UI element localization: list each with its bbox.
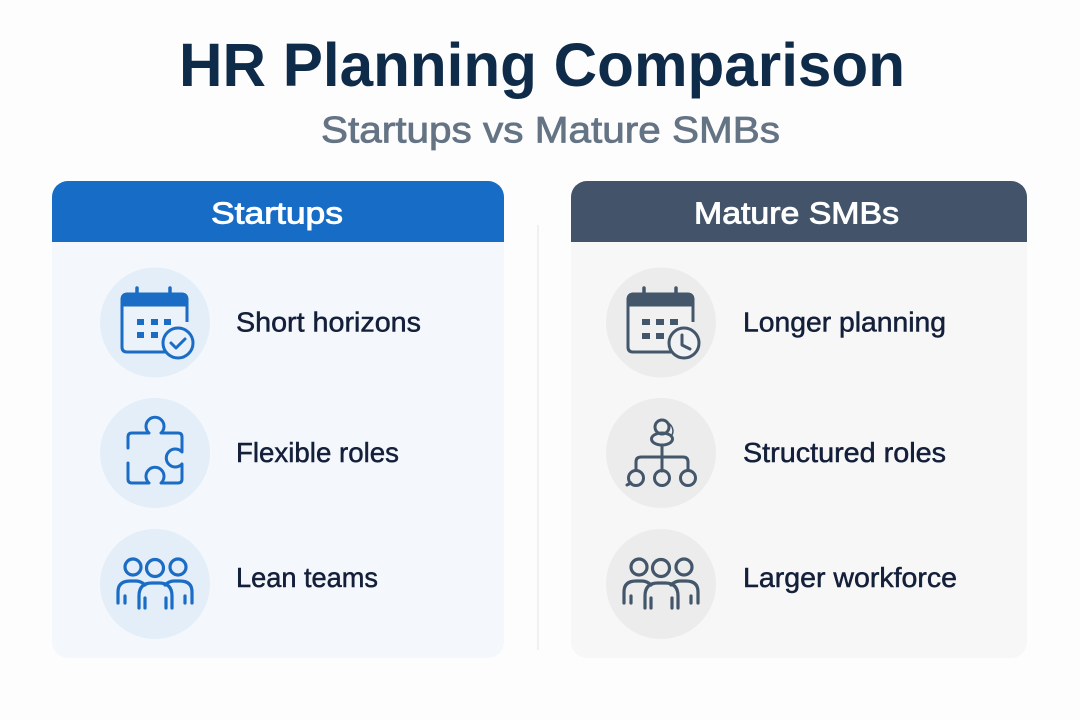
title: HR Planning Comparison [179,31,905,99]
panel header: startups: Startups [211,196,343,230]
icon: calendar with clock [606,268,716,378]
label: larger workforce: Larger workforce [743,562,957,593]
panel: mature smbs [571,181,1027,658]
panel: startups [52,181,504,658]
label: longer planning: Longer planning [743,306,946,338]
label: short horizons: Short horizons [236,306,421,338]
subtitle: Startups vs Mature SMBs [321,108,780,150]
icon: puzzle piece [100,398,210,508]
icon: lean team [100,529,210,639]
label: flexible roles: Flexible roles [236,437,399,468]
icon: calendar with check [100,268,210,378]
icon: larger workforce [606,529,716,639]
label: lean teams: Lean teams [236,562,378,593]
panel header: mature smbs: Mature SMBs [694,196,899,230]
icon: org chart [606,398,716,508]
panel header: mature smbs [571,181,1027,242]
panel header: startups [52,181,504,242]
label: structured roles: Structured roles [743,437,946,468]
